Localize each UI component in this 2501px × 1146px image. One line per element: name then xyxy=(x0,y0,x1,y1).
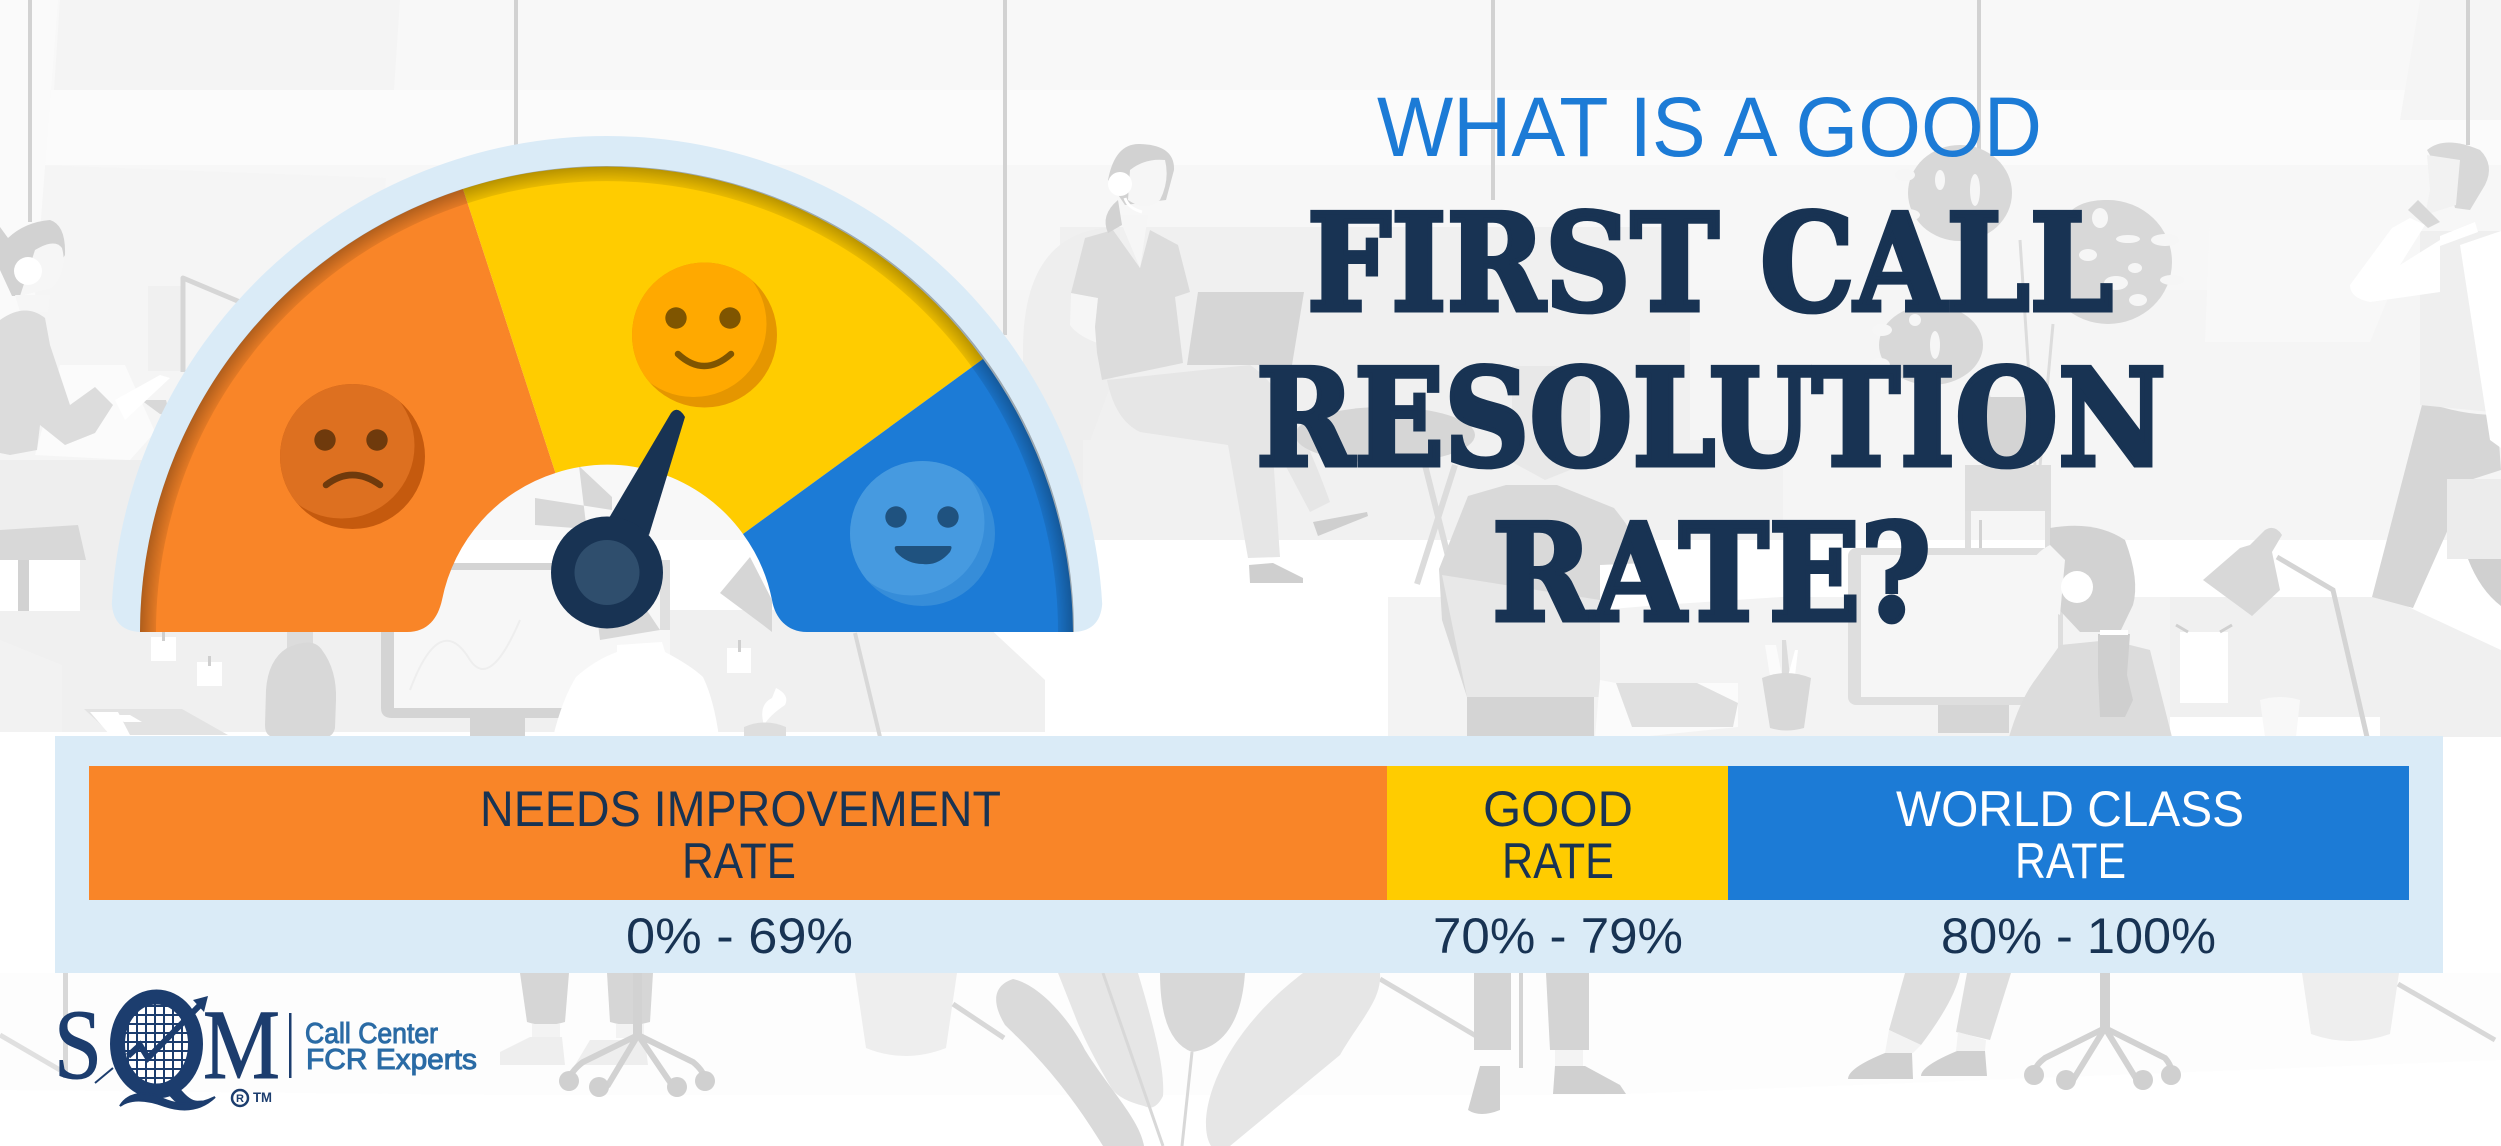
man on the phone xyxy=(2350,142,2501,608)
desk surfaces xyxy=(0,460,2501,740)
person from behind xyxy=(535,466,880,737)
yellow segment xyxy=(463,167,983,534)
needs improvement bar: RATE xyxy=(682,833,796,889)
window poles xyxy=(28,0,2470,335)
logo: SQM: R xyxy=(236,1093,244,1105)
lower legs, chairs, pots and plant xyxy=(0,973,2501,1146)
range: 0-69: 0% - 69% xyxy=(626,908,853,964)
icon: smile face xyxy=(632,262,777,408)
range: 80-100: 80% - 100% xyxy=(1941,908,2216,964)
range: 70-79: 70% - 79% xyxy=(1433,908,1683,964)
plant on stand xyxy=(1870,145,2184,548)
good bar: GOOD xyxy=(1483,781,1633,837)
icon: sad face xyxy=(280,384,425,529)
round table xyxy=(1295,407,1475,584)
woman with laptop xyxy=(1070,144,1368,583)
logo tagline: Call Center xyxy=(305,1018,438,1050)
left headset agent xyxy=(0,220,240,460)
logo: SQM: M xyxy=(203,989,280,1100)
gauge outer light arc xyxy=(112,136,1102,632)
title line: what is a good: WHAT IS A GOOD xyxy=(1377,80,2042,174)
logo grid xyxy=(125,1004,188,1084)
needs improvement bar xyxy=(89,766,1387,900)
blue segment xyxy=(743,359,1073,632)
orange segment xyxy=(140,189,556,632)
title line: first call: FIRST CALL xyxy=(1307,184,2113,342)
logo: SQM: Q xyxy=(108,971,205,1115)
right monitor xyxy=(1848,548,2063,733)
world class bar: RATE xyxy=(2015,833,2126,889)
centre monitor xyxy=(381,563,670,736)
desk lamp and note xyxy=(2176,528,2367,737)
world class bar xyxy=(1728,766,2409,900)
logo: SQM: FCR Experts xyxy=(306,1044,477,1076)
lower left lamp, notes and vase xyxy=(0,525,336,737)
world class bar: WORLD CLASS xyxy=(1896,781,2244,837)
logo: SQM xyxy=(59,990,476,1110)
woman at right desk xyxy=(2009,526,2172,737)
needle xyxy=(551,410,685,628)
good bar xyxy=(1387,766,1728,900)
gauge xyxy=(112,136,1102,632)
logo: SQM: TM xyxy=(253,1089,272,1105)
standing man with tablet xyxy=(1439,366,1781,737)
books and pencil cup xyxy=(1595,640,1811,737)
icon: happy face xyxy=(850,461,995,606)
needs improvement bar: NEEDS IMPROVEMENT xyxy=(480,781,1001,837)
title xyxy=(1256,80,2166,652)
title line: rate: RATE? xyxy=(1492,494,1931,652)
logo: SQM: S xyxy=(54,989,102,1100)
panel: rate ranges xyxy=(55,736,2443,973)
title line: resolution: RESOLUTION xyxy=(1256,339,2166,497)
good bar: RATE xyxy=(1502,833,1614,889)
